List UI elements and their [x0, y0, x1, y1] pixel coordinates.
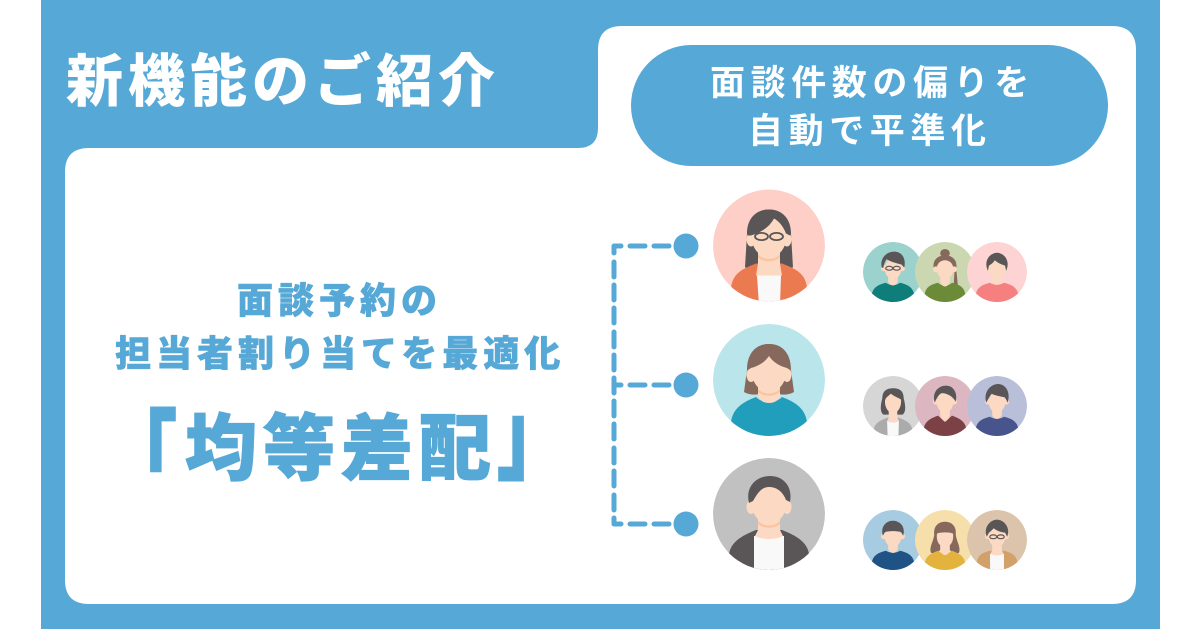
small avatar: man with glasses, green	[863, 242, 923, 304]
small avatar: man, coral	[967, 242, 1027, 304]
subheading	[115, 280, 565, 374]
connector dot 1	[674, 234, 698, 258]
small avatar: woman, grey	[863, 376, 923, 438]
small avatar: woman, yellow	[915, 510, 975, 572]
small avatar group 3	[863, 510, 1027, 572]
small avatar: woman with bun, olive	[915, 242, 975, 304]
connector dot 3	[674, 512, 698, 536]
subheading line 1: 面談予約の	[237, 280, 442, 321]
feature name text: 均等差配	[185, 410, 497, 490]
avatar: man with dark cardigan	[713, 458, 825, 574]
opening bracket: 「	[105, 403, 177, 515]
connector dot 2	[674, 372, 698, 398]
small avatar: man with glasses, tan jacket	[967, 510, 1027, 572]
title: 新機能のご紹介	[66, 50, 500, 114]
small avatar: man, dark blue	[863, 510, 923, 572]
small avatar: man, maroon	[915, 376, 975, 438]
callout pill	[631, 45, 1108, 166]
subheading line 2: 担当者割り当てを最適化	[115, 333, 565, 374]
callout text line 2: 自動で平準化	[748, 112, 992, 151]
avatar: woman with brown hair, teal top	[713, 324, 825, 440]
closing bracket: 」	[497, 380, 569, 493]
small avatar group 1	[863, 242, 1027, 304]
small avatar: man, navy	[967, 376, 1027, 438]
avatar: woman with glasses, orange jacket	[713, 190, 825, 306]
feature name	[105, 380, 569, 515]
callout text line 1: 面談件数の偏りを	[710, 64, 1035, 103]
small avatar group 2	[863, 376, 1027, 438]
connector lines	[614, 234, 698, 536]
